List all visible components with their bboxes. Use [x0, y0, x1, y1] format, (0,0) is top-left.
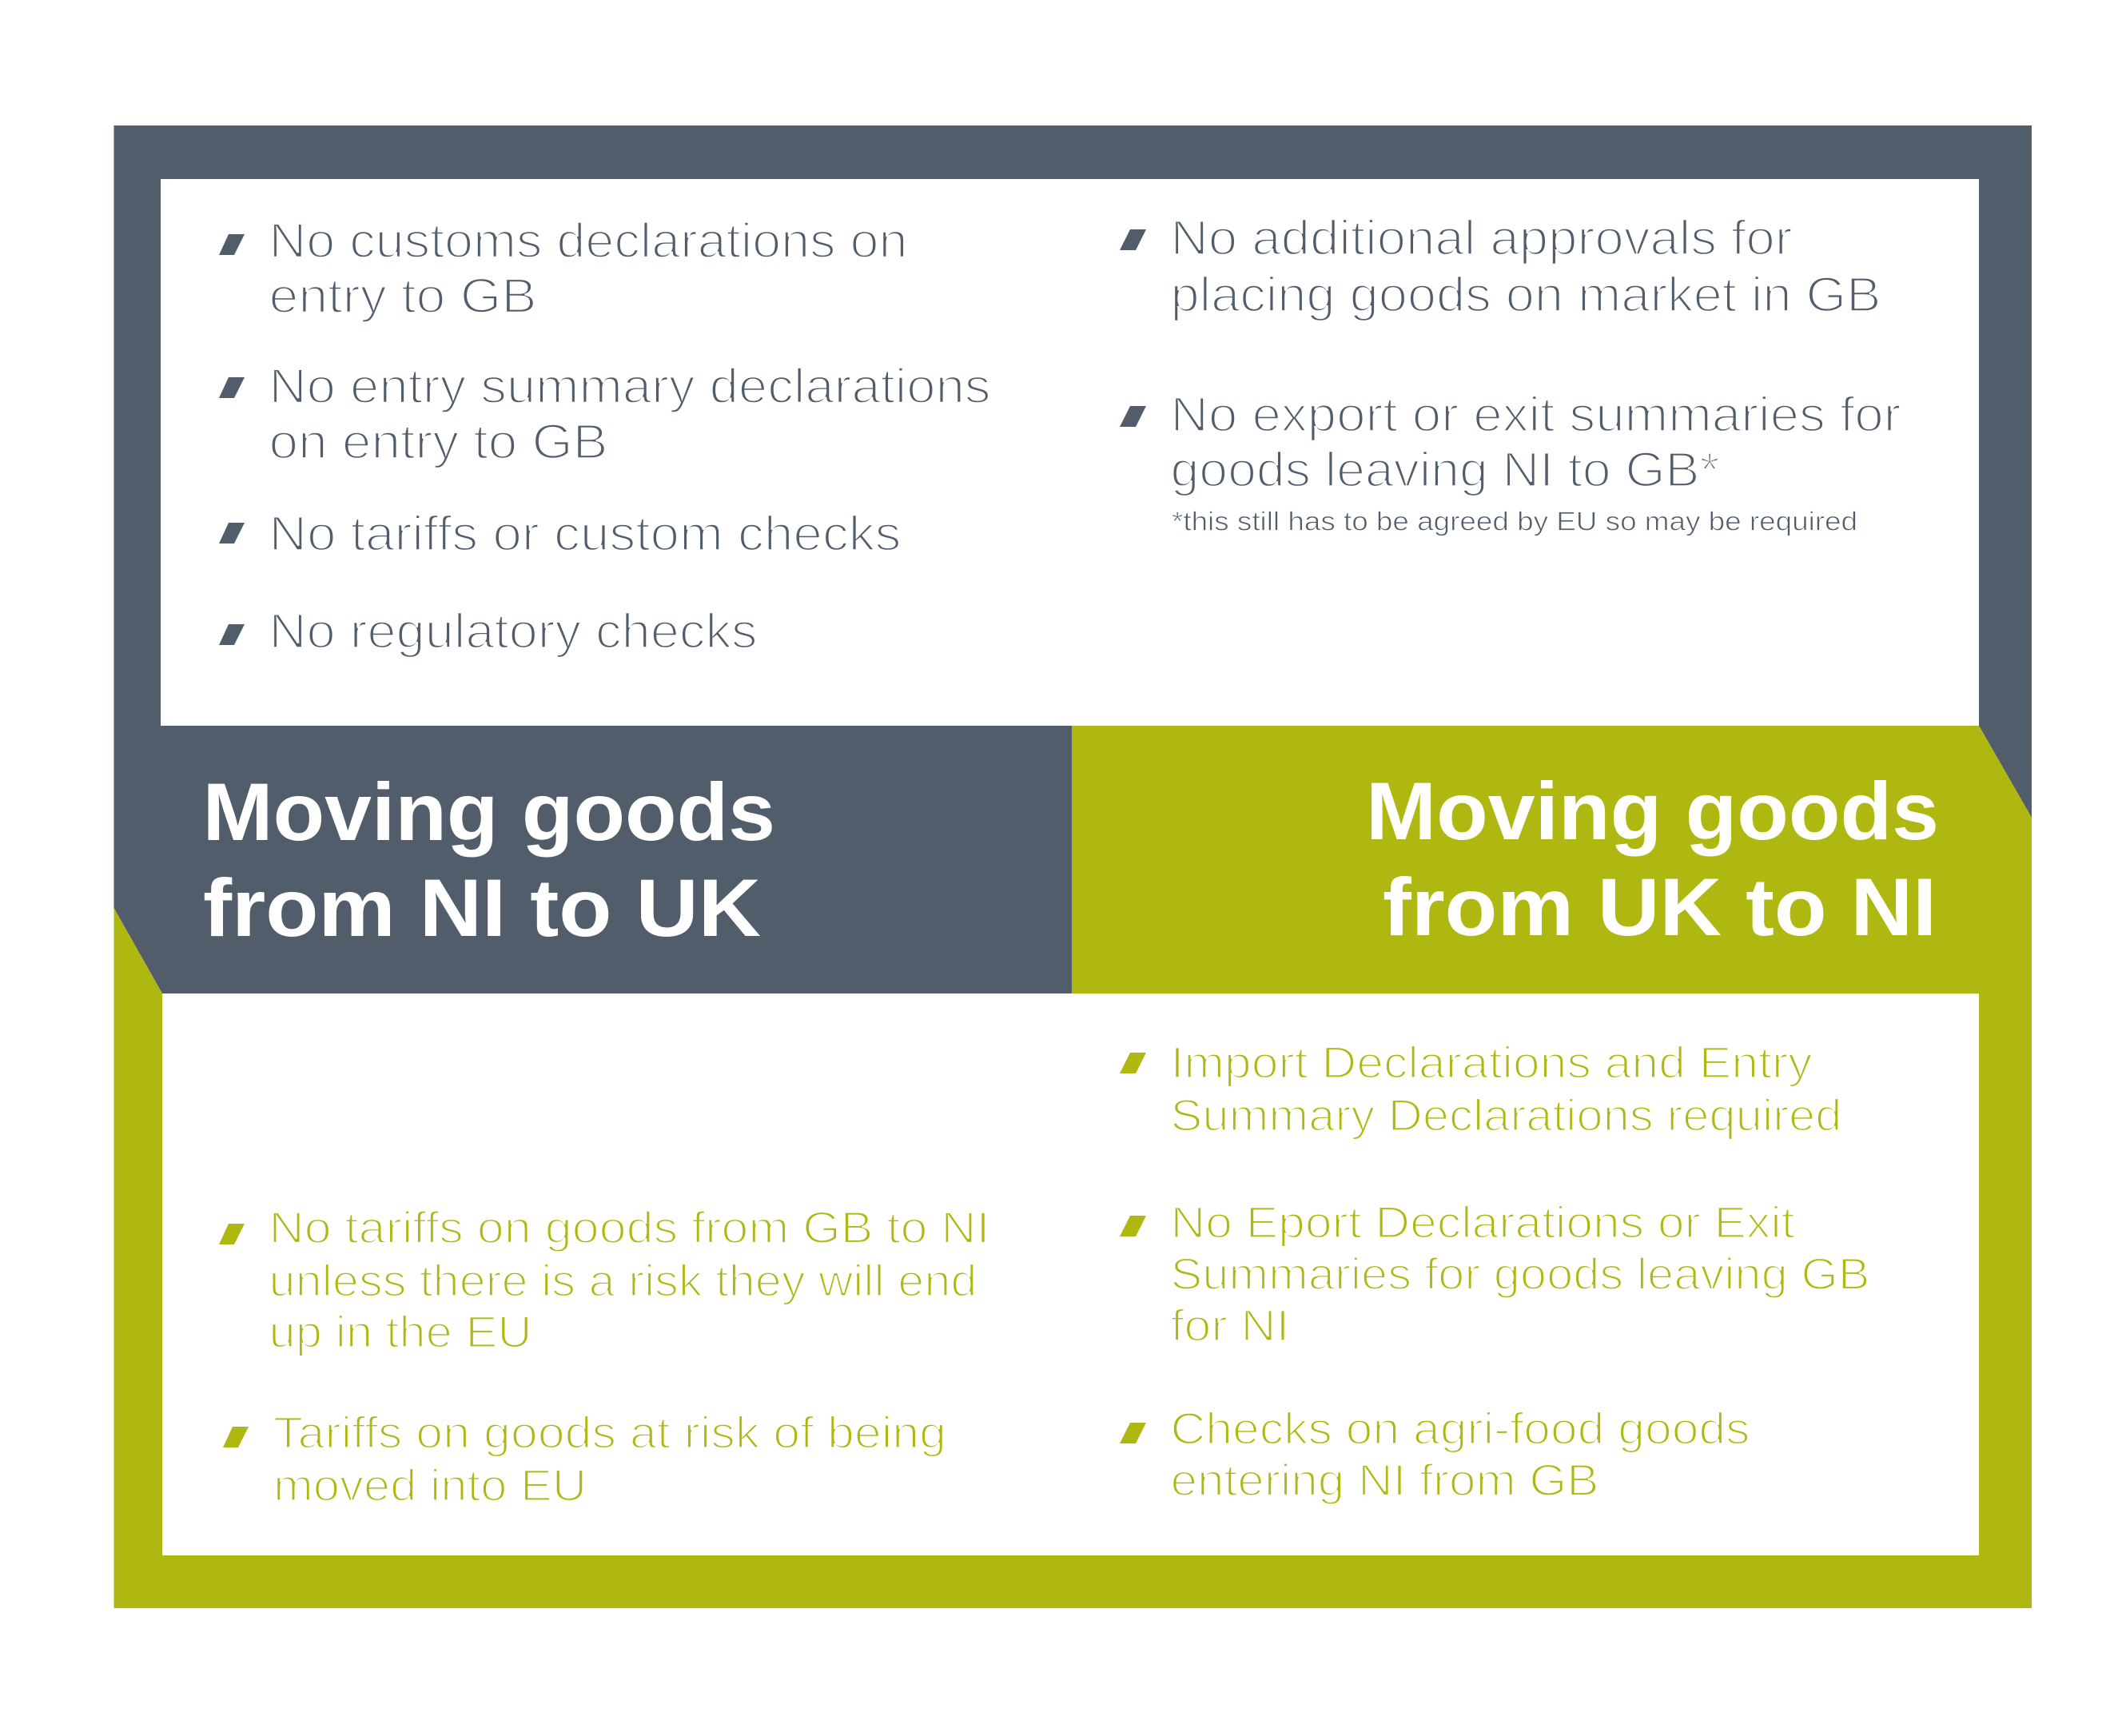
item: no export declarations: Summaries for goods leaving GB	[1170, 1248, 1870, 1299]
item: import declarations: Import Declarations and Entry	[1170, 1037, 1813, 1087]
list: UK to NI, left column	[219, 1202, 989, 1511]
heading: Moving goods from NI to UK: Moving goods	[203, 766, 775, 858]
list: UK to NI, right column	[1120, 1037, 1870, 1505]
list: NI to UK, left column	[219, 213, 991, 659]
item: no regulatory checks: No regulatory checks	[269, 604, 757, 659]
item: no export declarations: No Eport Declarations or Exit	[1170, 1197, 1795, 1247]
heading: Moving goods from UK to NI	[1366, 766, 1939, 953]
item: no export or exit summaries: No export or exit summaries for	[1170, 387, 1901, 441]
item: no export or exit summaries	[1120, 387, 1901, 497]
item: checks on agri-food: Checks on agri-food goods	[1170, 1404, 1750, 1453]
item: no export declarations: for NI	[1170, 1300, 1290, 1351]
item: checks on agri-food	[1120, 1404, 1750, 1505]
item: no additional approvals	[1120, 211, 1881, 321]
item: checks on agri-food: entering NI from GB	[1170, 1455, 1598, 1505]
item: no tariffs unless at risk: No tariffs on goods from GB to NI	[269, 1202, 989, 1252]
item: no tariffs unless at risk: unless there is a risk they will end	[269, 1255, 977, 1306]
item: no export declarations	[1120, 1197, 1870, 1351]
item: import declarations	[1120, 1037, 1841, 1140]
heading: Moving goods from UK to NI: Moving goods	[1366, 766, 1939, 857]
panel: green frame and UK to NI heading band	[113, 726, 2032, 1608]
item: no customs declarations: entry to GB	[269, 269, 537, 323]
item: tariffs on goods at risk	[223, 1407, 946, 1511]
item: no entry summary declarations: on entry to GB	[269, 414, 607, 468]
item: no tariffs unless at risk	[219, 1202, 989, 1357]
item: tariffs on goods at risk: Tariffs on goods at risk of being	[273, 1407, 946, 1458]
item: no additional approvals: placing goods on market in GB	[1170, 267, 1881, 321]
heading: Moving goods from NI to UK: from NI to UK	[203, 862, 761, 954]
item: no customs declarations: No customs declarations on	[269, 213, 908, 268]
item: no tariffs or custom checks: No tariffs or custom checks	[269, 507, 902, 561]
item: no export or exit summaries: goods leaving NI to GB*	[1170, 443, 1720, 497]
item: no tariffs unless at risk: up in the EU	[269, 1306, 532, 1357]
footnote: *this still has to be agreed by EU so may be required	[1172, 507, 1857, 536]
item: no customs declarations	[219, 213, 908, 323]
item: no entry summary declarations: No entry summary declarations	[269, 359, 991, 413]
heading: Moving goods from NI to UK	[203, 766, 775, 954]
item: no additional approvals: No additional approvals for	[1170, 211, 1792, 265]
item: no entry summary declarations	[219, 359, 991, 468]
heading: Moving goods from UK to NI: from UK to NI	[1383, 862, 1937, 953]
item: tariffs on goods at risk: moved into EU	[273, 1459, 587, 1511]
item: import declarations: Summary Declarations required	[1170, 1090, 1841, 1140]
list: NI to UK, right column	[1120, 211, 1901, 536]
panel: dark frame and NI to UK heading band	[113, 125, 2032, 993]
